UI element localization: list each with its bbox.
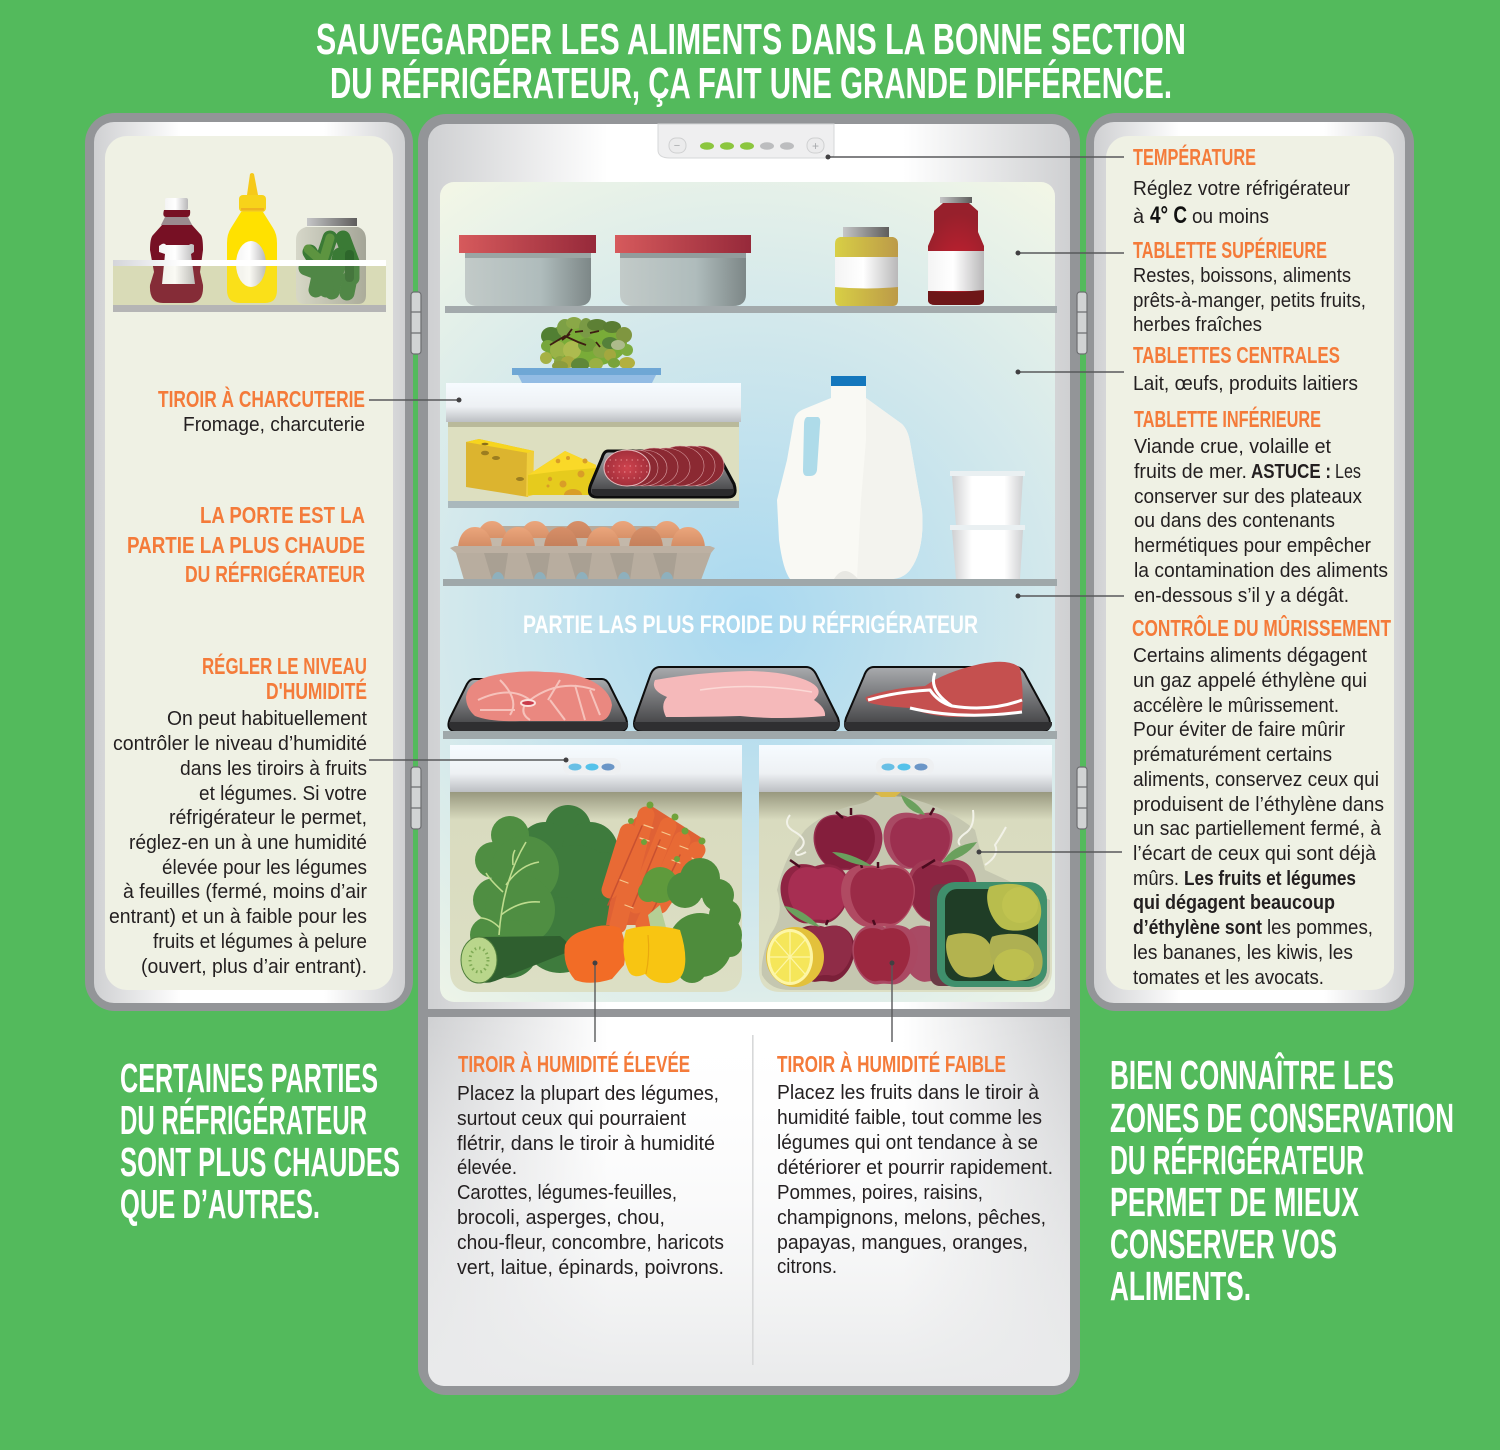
text: deli drawer: Fromage, charcuterie [183,414,365,436]
text: low humidity drawer [777,1050,1053,1278]
text: high humidity drawer: vert, laitue, épinards, poivrons. [457,1257,724,1279]
text: humidity setting [109,652,367,978]
text: warmest part: LA PORTE EST LA [200,502,365,528]
text: humidity setting: fruits et légumes à pelure [153,931,367,953]
text: warmest part: DU RÉFRIGÉRATEUR [185,560,365,587]
callout: storage zones: CONSERVER VOS [1110,1221,1337,1267]
text: ripening control: accélère le mûrissement. [1133,695,1339,717]
food: orange pepper [564,925,625,983]
callout: warmer parts: SONT PLUS CHAUDES [120,1139,400,1185]
food: leafy greens [466,805,623,978]
text: humidity setting: entrant) et un à faible pour les [109,906,367,928]
text: ripening control: Les fruits et légumes [1184,868,1356,890]
text: high humidity drawer: surtout ceux qui pourraient [457,1108,686,1130]
text: temperature: à [1133,206,1145,228]
text: ripening control: qui dégagent beaucoup [1133,892,1335,914]
text: temperature: 4° C [1150,202,1187,229]
text: high humidity drawer: brocoli, asperges, chou, [457,1207,665,1229]
text: temperature: TEMPÉRATURE [1133,143,1256,170]
food: grapes on a plate [512,317,661,383]
text: ripening control: tomates et les avocats. [1133,967,1324,989]
text: humidity setting: réglez-en un à une humidité [129,832,367,854]
text: middle shelves: Lait, œufs, produits laitiers [1133,373,1358,395]
text: ripening control: d’éthylène sont [1133,917,1262,939]
text: humidity setting: RÉGLER LE NIVEAU [202,652,367,679]
text: humidity setting: réfrigérateur le permet, [169,807,367,829]
text: top shelf: Restes, boissons, aliments [1133,265,1351,287]
food: mustard jar [835,227,898,306]
icon: temperature control panel [658,124,834,158]
food: pork on tray [448,671,628,731]
food: apple leaves [784,795,977,927]
drawer front [759,745,1052,792]
panel: cooler interior [440,182,1055,1002]
drawer front [446,383,741,422]
text: deli drawer: TIROIR À CHARCUTERIE [158,385,365,412]
drawer: high humidity vegetables [450,745,742,992]
text: warmest part [127,502,365,587]
food: pears in green tray [930,882,1047,987]
shelf: middle [443,579,1057,586]
text: temperature: Réglez votre réfrigérateur [1133,178,1350,200]
text: top shelf: prêts-à-manger, petits fruits, [1133,290,1366,312]
text: bottom shelf [1134,405,1388,607]
text: humidity setting: D'HUMIDITÉ [266,677,367,704]
text: bottom shelf: Les [1335,461,1361,483]
icon: pickle jar [296,218,366,304]
text: low humidity drawer: détériorer et pourrir rapidement. [777,1157,1053,1179]
text: ripening control: Pour éviter de faire mûrir [1133,719,1345,741]
door shelf back [113,266,386,305]
door shelf front [113,260,386,312]
text: high humidity drawer: flétrir, dans le tiroir à humidité [457,1133,715,1155]
text: ripening control: les bananes, les kiwis, les [1133,942,1353,964]
text: low humidity drawer: champignons, melons, pêches, [777,1207,1046,1229]
food: milk jug [777,376,922,579]
text: ripening control: Certains aliments dégagent [1133,645,1367,667]
text: humidity setting: On peut habituellement [167,708,367,730]
food: lemon [766,927,824,987]
text: low humidity drawer: Pommes, poires, raisins, [777,1182,983,1204]
food: broccoli and lettuce [638,858,742,983]
drawer front [450,745,742,792]
text: bottom shelf: hermétiques pour empêcher [1134,535,1371,557]
text: low humidity drawer: humidité faible, tout comme les [777,1107,1042,1129]
text: bottom shelf: Viande crue, volaille et [1134,436,1331,458]
text: bottom shelf: ou dans des contenants [1134,510,1335,532]
text: low humidity drawer: papayas, mangues, oranges, [777,1232,1028,1254]
text: humidity setting: à feuilles (fermé, moins d’air [123,881,367,903]
text: ripening control: les pommes, [1267,917,1373,939]
text: top shelf [1133,236,1366,336]
text: bottom shelf: la contamination des aliments [1134,560,1388,582]
icon: mustard bottle [227,173,277,303]
food: yogurt cups [950,471,1025,579]
text: temperature [1133,143,1350,229]
food: apples [781,808,976,984]
title [316,15,1186,108]
icon: temperature control panel: + [812,139,819,153]
text: bottom shelf: conserver sur des plateaux [1134,486,1362,508]
food: steak on tray [844,662,1052,731]
callout: storage zones: ALIMENTS. [1110,1263,1251,1309]
drawer: deli [446,383,741,508]
text: humidity setting: dans les tiroirs à fruits [180,758,367,780]
text: middle shelves [1133,342,1358,395]
icon: temperature control panel: − [674,140,680,152]
text: high humidity drawer: TIROIR À HUMIDITÉ ÉLEVÉE [458,1050,690,1077]
text: warmest part: PARTIE LA PLUS CHAUDE [127,532,365,558]
text: top shelf: herbes fraîches [1133,314,1262,336]
leader lines [369,154,1124,1042]
text: high humidity drawer: chou-fleur, concombre, haricots [457,1232,724,1254]
food: eggs in carton [450,521,715,580]
text: high humidity drawer [457,1050,724,1279]
text: humidity setting: contrôler le niveau d’humidité [113,733,367,755]
label: coldest part: PARTIE LAS PLUS FROIDE DU RÉFRIGÉRATEUR [523,610,978,639]
text: ripening control: un sac partiellement fermé, à [1133,818,1382,840]
food: cheese wedge [528,451,596,495]
text: high humidity drawer: Placez la plupart des légumes, [457,1083,719,1105]
text: bottom shelf: en-dessous s’il y a dégât. [1134,585,1349,607]
humidity dial [876,758,934,775]
humidity dial [563,758,621,775]
text: ripening control: l’écart de ceux qui sont déjà [1133,843,1377,865]
text: ripening control: CONTRÔLE DU MÛRISSEMENT [1132,614,1391,641]
food: cucumber [461,936,569,983]
callout: warmer parts: QUE D’AUTRES. [120,1181,320,1227]
panel: left fridge door [85,113,413,1011]
drawer shelf [448,501,739,508]
food: yellow pepper [623,926,685,983]
food: salami tray [589,446,735,497]
text: temperature: ou moins [1192,206,1269,228]
text: high humidity drawer: Carottes, légumes-feuilles, [457,1182,677,1204]
shelf: lower [443,731,1057,739]
callout: storage zones [1110,1052,1454,1309]
icon: plastic bag [762,792,1050,990]
text: middle shelves: TABLETTES CENTRALES [1133,342,1340,368]
text: low humidity drawer: citrons. [777,1256,837,1278]
shelf: top [445,306,1057,313]
text: ripening control: mûrs. [1133,868,1179,890]
text: bottom shelf: fruits de mer. [1134,461,1247,483]
callout: storage zones: PERMET DE MIEUX [1110,1179,1359,1225]
food: yellow cheese block [466,439,534,497]
text: high humidity drawer: élevée. [457,1157,517,1179]
food: top shelf containers [459,235,751,306]
panel: right fridge door [1086,113,1414,1011]
text: deli drawer [158,385,365,436]
text: ripening control: produisent de l’éthylène dans [1133,794,1384,816]
text: top shelf: TABLETTE SUPÉRIEURE [1133,236,1327,263]
text: humidity setting: élevée pour les légumes [162,857,367,879]
text: low humidity drawer: Placez les fruits dans le tiroir à [777,1082,1040,1104]
drawer: low humidity fruit [759,745,1052,992]
text: humidity setting: (ouvert, plus d’air entrant). [141,956,367,978]
text: ripening control: aliments, conservez ceux qui [1133,769,1379,791]
food: red bottle [928,197,984,305]
panel: fridge body [418,114,1080,1395]
food: carrots [606,802,706,925]
text: ripening control: un gaz appelé éthylène qui [1133,670,1367,692]
text: bottom shelf: TABLETTE INFÉRIEURE [1134,405,1321,432]
food: chicken on tray [634,667,840,731]
icon: ketchup bottle [150,198,203,303]
text: low humidity drawer: légumes qui ont tendance à se [777,1132,1038,1154]
callout: warmer parts [120,1055,400,1227]
text: humidity setting: et légumes. Si votre [199,783,367,805]
text: low humidity drawer: TIROIR À HUMIDITÉ FAIBLE [777,1050,1006,1077]
text: ripening control [1132,614,1391,989]
icon: ethylene fumes [787,810,1006,865]
callout: warmer parts: DU RÉFRIGÉRATEUR [120,1097,367,1143]
text: ripening control: prématurément certains [1133,744,1332,766]
callout: warmer parts: CERTAINES PARTIES [120,1055,378,1101]
icon: hinges [411,292,1087,829]
text: bottom shelf: ASTUCE : [1251,461,1331,483]
